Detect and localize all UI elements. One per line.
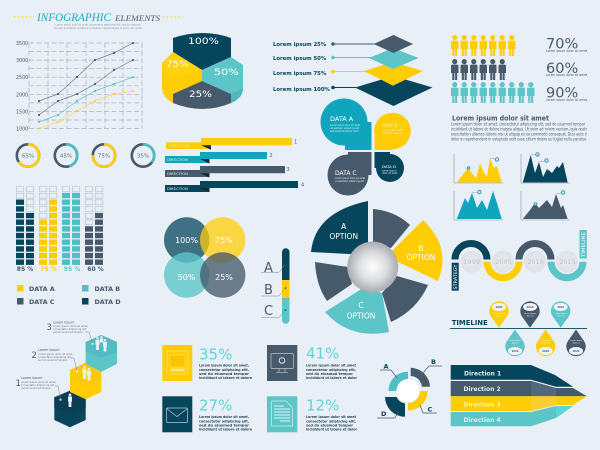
timeline pins: dolor sit [495, 314, 503, 318]
isometric hex steps: Lorem Ipsum [38, 348, 59, 352]
ABC slider [261, 248, 290, 324]
stat tile: 12%: sed do eiusmod tempor [306, 424, 353, 428]
legend: DATA B [94, 285, 120, 293]
timeline pins: dolor sit [511, 342, 519, 344]
stacked diamonds with labels: Lorem ipsum 25% [273, 42, 327, 48]
donut gauges [17, 144, 154, 167]
year timeline: STRATEGY [453, 264, 459, 290]
stacked cell bars: 60 % [87, 266, 104, 273]
timeline pins: dolor sit [526, 314, 534, 318]
quadrant data shapes: sit amet consect [383, 132, 401, 135]
isometric hex steps: sed do eiusmod tempor [53, 330, 84, 334]
quadrant data shapes: consectetur adipiscing elit [335, 180, 364, 183]
isometric hex steps: consectetur adipiscing elit, [53, 327, 87, 331]
timeline pins: Lorem ipsum [540, 339, 552, 342]
timeline pins: 2020 [573, 349, 580, 353]
title [14, 12, 183, 30]
ribbon bars: DIRECTION [167, 157, 188, 162]
isometric hex steps: consectetur adipiscing elit, [21, 383, 55, 387]
percent stats: Lorem ipsum dolor sit amet, [546, 73, 588, 77]
stat tile: 12% [267, 396, 357, 432]
stat tile: 27%: 27% [199, 396, 232, 414]
radial option pie: OPTION [347, 312, 375, 320]
year timeline: TIMELINE [581, 232, 587, 258]
stat tile: 35% [162, 345, 252, 381]
quadrant data shapes: Lorem ipsum dolor [383, 129, 404, 132]
legend: DATA C [29, 298, 55, 306]
title: ELEMENTS [114, 13, 161, 23]
venn diagram: 75% [215, 236, 233, 245]
radial option pie: C [358, 301, 364, 310]
ABC slider: A [264, 261, 273, 276]
stacked cell bars: 75 % [40, 266, 57, 273]
quadrant data shapes: DATA A [330, 115, 354, 123]
3D hexagon pie: 50% [214, 68, 239, 78]
stacked cell bars [16, 186, 104, 273]
timeline pins: 2015 [557, 305, 564, 309]
percent stats [546, 36, 588, 102]
3D hexagon pie: 100% [188, 37, 219, 47]
timeline pins: Lorem ipsum [570, 339, 582, 342]
3D hexagon pie: 75% [166, 60, 189, 70]
isometric hex steps: 1 [16, 379, 21, 389]
line chart: 2500 [16, 75, 28, 81]
title: INFOGRAPHIC [36, 12, 111, 24]
donut gauges: 65% [22, 154, 34, 160]
year timeline: 2015 [559, 258, 576, 266]
stacked diamonds with labels: Lorem ipsum 50% [273, 56, 327, 62]
venn diagram: 100% [175, 236, 198, 245]
stat tile: 41% [267, 344, 357, 381]
direction arrow: Direction 1 [464, 370, 501, 378]
paragraph [451, 114, 587, 142]
year timeline: 1999 [463, 258, 480, 266]
quadrant data shapes: Lorem ipsum [382, 170, 396, 172]
stat tile: 12%: incididunt ut labore et dolor [306, 428, 357, 432]
isometric hex steps: consectetur adipiscing elit, [38, 355, 72, 359]
percent stats: 70% [546, 36, 578, 52]
stacked diamonds with labels [273, 35, 432, 106]
percent stats: Lorem ipsum dolor sit amet, [546, 98, 588, 102]
ribbon bars: 1 [294, 140, 297, 146]
ribbon bars [165, 138, 304, 192]
legend: DATA A [29, 285, 55, 293]
stat tile: 35%: Lorem ipsum dolor sit amet, [199, 364, 249, 368]
stacked diamonds with labels: Lorem ipsum 100% [273, 87, 331, 93]
paragraph: Lorem ipsum dolor sit amet [452, 114, 550, 122]
ribbon bars: DIRECTION [167, 186, 188, 191]
title: tempor incididunt ut labore et dolore magna aliqua ut enim ad minim [54, 26, 142, 30]
legend [17, 285, 121, 306]
ABC slider: B [264, 283, 273, 298]
ribbon bars: DIRECTION [168, 143, 190, 148]
line chart [16, 41, 142, 132]
stat tile: 12%: Lorem ipsum dolor sit amet [306, 415, 356, 419]
isometric hex steps: Lorem ipsum dolor sit amet, [21, 380, 56, 384]
stat tile: 27%: Lorem ipsum dolor sit amet, [199, 415, 249, 419]
title: Lorem ipsum dolor sit amet, consectetur adipiscing elit, sed do eiusmod [56, 22, 141, 26]
timeline pins: 2010 [527, 305, 534, 309]
year timeline: 2005 [495, 258, 512, 266]
direction arrow [451, 365, 587, 426]
timeline pins: dolor sit [542, 342, 550, 344]
stacked diamonds with labels: Lorem ipsum 75% [273, 71, 327, 77]
small segmented donut [377, 358, 442, 418]
isometric hex steps: Lorem ipsum dolor sit amet, [38, 352, 73, 356]
timeline pins: Lorem ipsum [524, 312, 536, 315]
venn diagram: 50% [178, 273, 196, 282]
legend: DATA D [94, 298, 121, 306]
line chart: 3500 [16, 41, 28, 47]
isometric hex steps: Lorem Ipsum [21, 376, 42, 380]
stat tile: 41%: sed do eiusmod tempor [306, 372, 353, 376]
stat tile: 41%: incididunt ut labore et dolor [306, 376, 357, 380]
quadrant data shapes [320, 98, 411, 196]
percent stats: 60% [546, 61, 578, 77]
year timeline: 2010 [527, 258, 544, 266]
line chart: 3000 [16, 58, 28, 64]
radial option pie [311, 201, 443, 334]
stat tile: 12%: 12% [306, 396, 339, 414]
stat tile: 27%: incididunt ut labore et dolore [199, 428, 252, 432]
isometric hex steps: 3 [46, 323, 52, 333]
quadrant data shapes: Lorem ipsum dolor sit amet [335, 177, 365, 180]
isometric hex steps [16, 320, 117, 427]
stat tile: 35%: incididunt ut labore et dolore [199, 376, 252, 380]
percent stats: 90% [546, 85, 578, 101]
line chart: 1500 [16, 110, 28, 116]
isometric hex steps: Lorem Ipsum [53, 320, 74, 324]
ribbon bars: 3 [286, 167, 290, 173]
quadrant data shapes: dolor sit amet [382, 172, 397, 175]
line chart: 1000 [16, 126, 28, 132]
radial option pie: OPTION [407, 253, 435, 262]
direction arrow: Direction 3 [464, 402, 501, 408]
radial option pie: B [418, 244, 424, 253]
donut gauges: 75% [98, 154, 110, 160]
radial option pie: A [341, 222, 347, 231]
timeline pins: 2018 [542, 349, 549, 353]
timeline pins: dolor sit [557, 314, 565, 318]
stat tile: 41%: 41% [306, 344, 339, 362]
stat tile: 27%: sed do eiusmod tempor [199, 424, 250, 428]
isometric hex steps: sed do eiusmod tempor [21, 386, 52, 390]
donut gauges: 35% [137, 154, 149, 160]
small segmented donut: D [381, 410, 387, 418]
small segmented donut: B [431, 358, 436, 366]
stat tile: 35%: sed do eiusmod tempor [199, 372, 250, 376]
timeline pins: TIMELINE [452, 319, 488, 327]
stat tile: 12%: consectetur adipiscing elit, [306, 419, 356, 423]
isometric hex steps: Lorem ipsum dolor sit amet, [53, 324, 88, 328]
3D hexagon pie [162, 33, 243, 109]
small segmented donut: A [384, 362, 389, 370]
3D hexagon pie: 25% [189, 90, 212, 100]
isometric hex steps: 2 [32, 351, 37, 361]
timeline pins: Lorem ipsum [555, 312, 567, 315]
venn diagram [164, 217, 245, 298]
quadrant data shapes: sed eiusmod tempor dolor [330, 130, 359, 133]
stacked cell bars: 85 % [17, 266, 33, 273]
stat tile: 35%: consectetur adipiscing elit, [199, 368, 249, 372]
timeline pins: 2005 [496, 305, 503, 309]
stat tile: 27% [162, 396, 252, 432]
timeline pins: dolor sit [572, 342, 580, 344]
radial option pie: OPTION [329, 232, 358, 241]
quadrant data shapes: Lorem ipsum dolor sit amet [330, 124, 360, 127]
quadrant data shapes: DATA B [382, 123, 398, 128]
people pictograms [451, 35, 534, 103]
donut gauges: 45% [60, 154, 72, 160]
ribbon bars: DIRECTION [167, 171, 188, 176]
line chart: 2000 [16, 92, 28, 98]
ribbon bars: 4 [301, 182, 304, 188]
ribbon bars: 2 [270, 153, 273, 159]
direction arrow: Direction 4 [464, 417, 501, 424]
stacked cell bars: 95 % [64, 266, 80, 273]
direction arrow: Direction 2 [464, 386, 501, 393]
timeline pins: Lorem ipsum [509, 339, 521, 342]
quadrant data shapes: consectetur adipiscing elit [330, 127, 359, 130]
quadrant data shapes: DATA C [335, 170, 357, 177]
stat tile: 41%: consectetur adipiscing elit, [306, 368, 356, 372]
year timeline [452, 230, 587, 291]
stat tile: 27%: consectetur adipiscing elit, [199, 419, 249, 423]
venn diagram: 25% [215, 273, 233, 282]
stat tile: 35%: 35% [199, 346, 232, 364]
percent stats: Lorem ipsum dolor sit amet, [546, 49, 588, 53]
timeline pins: 2016 [512, 349, 519, 353]
ABC slider: C [264, 304, 273, 319]
mini area charts [454, 153, 570, 220]
isometric hex steps: sed do eiusmod tempor [38, 358, 69, 362]
quadrant data shapes: DATA D [382, 164, 396, 169]
stat tile: 41%: Lorem ipsum dolor sit amet [306, 364, 356, 368]
small segmented donut: C [428, 406, 432, 414]
timeline pins [450, 301, 587, 356]
timeline pins: Lorem ipsum [493, 312, 505, 315]
